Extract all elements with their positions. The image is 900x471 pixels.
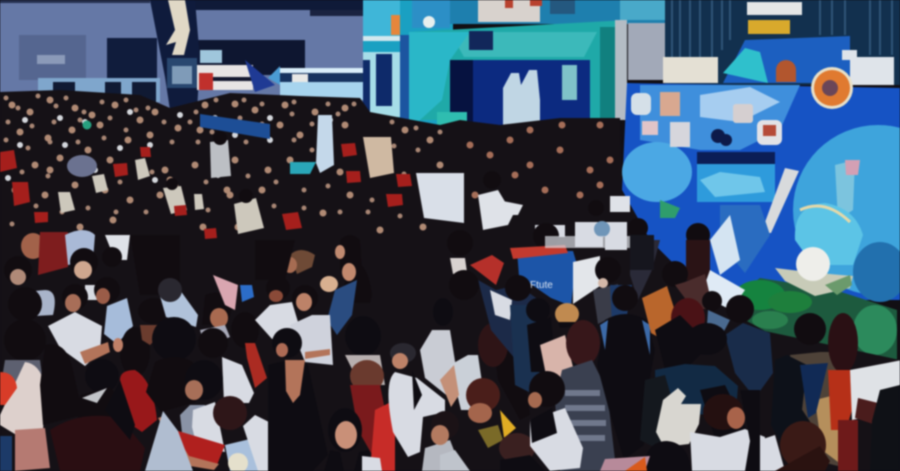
foreground people centre xyxy=(255,235,445,471)
green plants xyxy=(730,278,897,363)
right hall wall with blue booth xyxy=(663,0,900,85)
foreground people centre-right xyxy=(420,230,615,471)
left teal booth xyxy=(363,0,453,125)
big blue ocean screen xyxy=(622,67,900,300)
right globe and white sphere prop xyxy=(710,215,900,302)
foreground people right xyxy=(593,257,900,471)
middle crowd: Ftute xyxy=(530,280,553,291)
banner with white figure xyxy=(150,0,200,110)
foreground people centre-left xyxy=(138,275,293,471)
top booth frieze xyxy=(450,0,667,24)
middle crowd xyxy=(478,171,745,310)
foreground people left xyxy=(0,230,180,471)
booth: white and blue xyxy=(268,66,363,100)
central teal booth with dark-blue stage xyxy=(409,20,665,135)
booth: red and white xyxy=(197,50,275,92)
back wall: left hall xyxy=(0,0,365,110)
